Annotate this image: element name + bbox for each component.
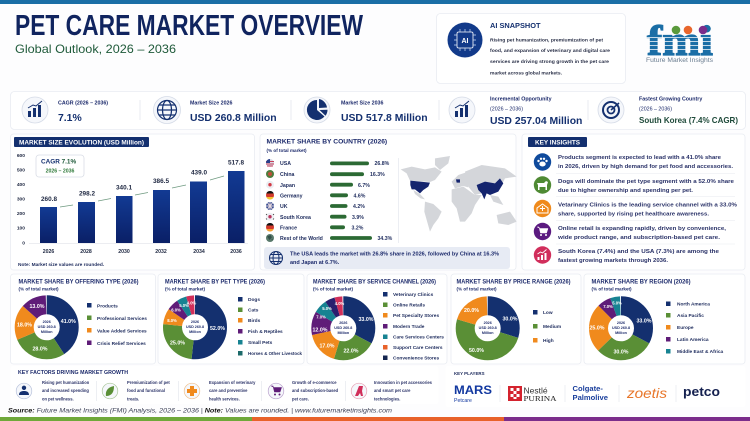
donut chart: offering type: USD 260.8 bbox=[38, 325, 56, 329]
donut chart: region: 33.0% bbox=[636, 318, 652, 324]
legend: service channel: Care Services Centers bbox=[393, 334, 444, 340]
logo: Petco: petco bbox=[683, 384, 720, 399]
country bars: China bbox=[280, 172, 295, 178]
donut chart: region: 30.0% bbox=[613, 349, 629, 355]
factor: veterinary care: care and preventive bbox=[209, 388, 248, 393]
bar chart: 439.0 bbox=[191, 170, 207, 176]
icons: country flags bbox=[266, 159, 274, 242]
donut chart: price range: USD 260.8 bbox=[479, 326, 497, 330]
factor: pet humanization: Rising pet humanization bbox=[42, 380, 90, 385]
panel: price range: (% of total market) bbox=[456, 286, 497, 292]
factor: premiumization: Premiumization of pet bbox=[127, 380, 170, 385]
factor: innovation: and smart pet care bbox=[374, 388, 411, 393]
panel: region: (% of total market) bbox=[592, 286, 632, 292]
panel: offering type bbox=[10, 274, 156, 364]
logo: Nestle Purina: Nestlé bbox=[524, 386, 548, 396]
logo: Zoetis: zoetis bbox=[626, 385, 667, 401]
donut chart: price range: Million bbox=[482, 331, 494, 335]
bottom colour band bbox=[0, 417, 750, 421]
legend: service channel: Convenience Stores bbox=[393, 356, 439, 362]
country bars: 3.9% bbox=[352, 215, 364, 221]
logo: Mars Petcare: MARS bbox=[454, 385, 492, 397]
legend: service channel: Modern Trade bbox=[393, 324, 425, 330]
insight: veterinary clinics: share, supported by rising pet healthcare awareness. bbox=[558, 212, 709, 218]
donut chart: price range: 50.0% bbox=[469, 348, 484, 354]
bar chart: 2036 bbox=[230, 249, 242, 255]
title: PET CARE MARKET OVERVIEW bbox=[15, 10, 363, 42]
heading: price range: MARKET SHARE BY PRICE RANGE (2026) bbox=[456, 278, 570, 286]
factor: innovation: Innovation in pet accessories bbox=[374, 380, 433, 385]
factor: pet humanization: on pet wellness. bbox=[42, 396, 74, 402]
donut chart: offering type bbox=[17, 304, 76, 352]
factor: premiumization bbox=[102, 380, 170, 402]
KPI: market size 2036 bbox=[304, 97, 428, 124]
donut chart: pet type: 52.0% bbox=[210, 326, 225, 332]
donut chart: offering type: Million bbox=[41, 330, 53, 334]
legend: region: Middle East & Africa bbox=[677, 349, 724, 355]
KPI: fastest growing country bbox=[598, 96, 738, 125]
donut chart: offering type: 13.0% bbox=[29, 304, 45, 310]
KPI: incremental opportunity: (2026 – 2036) bbox=[490, 106, 523, 112]
legend: price range: Low bbox=[543, 310, 553, 316]
factor: premiumization: food and functional bbox=[127, 388, 165, 393]
logo: Mars Petcare bbox=[454, 385, 492, 404]
donut chart: service channel: 17.0% bbox=[319, 343, 335, 349]
bar chart bbox=[17, 153, 248, 255]
donut chart: offering type: 28.0% bbox=[32, 346, 48, 352]
panel: market share by country: (% of total market) bbox=[266, 148, 307, 153]
panel: KPI strip bbox=[10, 92, 746, 130]
panel: region bbox=[584, 274, 745, 364]
factor: pet humanization bbox=[16, 380, 90, 402]
donut chart: region: Million bbox=[615, 331, 628, 335]
panel: key factors bbox=[10, 366, 438, 404]
legend: service channel: Support Care Centers bbox=[393, 345, 443, 351]
country bars bbox=[280, 161, 393, 242]
donut chart: pet type: Million bbox=[189, 330, 202, 334]
country bars: 4.6% bbox=[354, 194, 366, 200]
legend: price range: High bbox=[543, 338, 554, 344]
donut chart: region: 5.0% bbox=[612, 301, 622, 306]
donut chart: pet type: USD 260.8 bbox=[186, 325, 204, 329]
country bars: UK bbox=[280, 204, 288, 210]
CAGR callout: 2026 – 2036 bbox=[46, 168, 75, 174]
country bars: 16.3% bbox=[370, 172, 385, 178]
legend: pet type: Fish & Reptiles bbox=[248, 329, 283, 335]
legend: price range bbox=[533, 310, 561, 344]
icon: AI chip: AI bbox=[462, 38, 469, 45]
factor: innovation: technologies. bbox=[374, 396, 400, 402]
country bars: 34.3% bbox=[378, 236, 393, 242]
donut chart: pet type: 25.0% bbox=[170, 340, 185, 346]
legend: pet type: Small Pets bbox=[248, 340, 273, 346]
bar chart: 100 bbox=[17, 226, 25, 232]
heading: key insights bbox=[528, 137, 587, 147]
KPI: incremental opportunity: Incremental Opportunity bbox=[490, 96, 552, 102]
bar chart: 300 bbox=[17, 196, 25, 202]
panel: price range bbox=[451, 274, 581, 364]
donut chart: service channel: 33.0% bbox=[358, 317, 374, 323]
bar chart: 2032 bbox=[155, 249, 167, 255]
insight: online retail bbox=[534, 223, 726, 241]
callout: country summary bbox=[264, 247, 510, 269]
factor: innovation bbox=[351, 380, 433, 402]
heading: service channel: MARKET SHARE BY SERVICE CHANNEL (2026) bbox=[313, 278, 436, 286]
insight: online retail: wide product range, and subscription-based pet care. bbox=[557, 235, 720, 241]
callout: country summary: The USA leads the market with 26.8% share in 2026, followed by China at 16.3% bbox=[290, 252, 499, 258]
donut chart: service channel: 2026 bbox=[339, 321, 347, 325]
bar chart: 2026 bbox=[43, 249, 54, 255]
bar chart: 200 bbox=[17, 211, 25, 217]
icon: AI chip bbox=[448, 22, 482, 58]
donut chart: region: USD 260.8 bbox=[612, 326, 630, 330]
legend: offering type: Professional Services bbox=[97, 316, 147, 322]
KPI: CAGR bbox=[22, 97, 108, 124]
AI snapshot heading: AI SNAPSHOT bbox=[490, 21, 541, 30]
source line: Source: Future Market Insights (FMI) Analysis, 2026 – 2036 | Note: Values are rounded. | www.futuremarketinsights.com bbox=[8, 408, 393, 414]
donut chart: pet type: 5.0% bbox=[179, 303, 189, 308]
insight: veterinary clinics bbox=[534, 200, 738, 218]
logo: Nestle Purina bbox=[508, 386, 557, 403]
factor: veterinary care: health services. bbox=[209, 396, 240, 402]
country bars: 6.7% bbox=[358, 183, 370, 189]
donut chart: region: 2026 bbox=[617, 321, 625, 325]
factor: e-commerce: Growth of e-commerce bbox=[292, 380, 337, 385]
factor: veterinary care bbox=[184, 380, 256, 402]
CAGR callout: CAGR 7.1% bbox=[41, 158, 76, 166]
donut chart: service channel: 22.0% bbox=[343, 348, 359, 354]
legend: region: North America bbox=[677, 302, 710, 308]
donut chart: service channel: 5.0% bbox=[322, 306, 332, 311]
KPI: incremental opportunity: USD 257.04 Million bbox=[490, 116, 582, 127]
panel: AI snapshot bbox=[436, 14, 626, 84]
panel: market size evolution bbox=[10, 134, 254, 270]
logo: Future Market Insights: fmi bbox=[647, 19, 713, 65]
legend: region: Latin America bbox=[677, 337, 709, 343]
KPI: incremental opportunity bbox=[449, 96, 582, 127]
heading: region: MARKET SHARE BY REGION (2026) bbox=[592, 278, 690, 286]
panel: market share by country bbox=[260, 134, 517, 270]
factor: e-commerce: pet care. bbox=[292, 396, 309, 402]
legend: service channel: Veterinary Clinics bbox=[393, 292, 434, 298]
panel: key players bbox=[446, 366, 746, 407]
donut chart: offering type: 2026 bbox=[43, 320, 51, 324]
KPI: market size 2036: USD 517.8 Million bbox=[341, 113, 428, 124]
country bars: USA bbox=[280, 161, 291, 167]
legend: service channel: Pet Specialty Stores bbox=[393, 313, 439, 319]
country bars: Japan bbox=[280, 183, 295, 189]
bar chart: 517.8 bbox=[228, 160, 244, 166]
legend: offering type: Value Added Services bbox=[97, 328, 147, 334]
heading: pet type: MARKET SHARE BY PET TYPE (2026) bbox=[165, 278, 265, 286]
legend: pet type: Birds bbox=[248, 318, 261, 324]
KPI: market size 2026: Market Size 2026 bbox=[190, 100, 232, 106]
bar chart: 400 bbox=[17, 182, 25, 188]
insight: dogs bbox=[534, 176, 735, 194]
country bars: France bbox=[280, 226, 297, 232]
donut chart: service channel: USD 260.8 bbox=[334, 326, 352, 330]
insight: online retail: Online retail is expanding rapidly, driven by convenience, bbox=[558, 226, 726, 232]
legend: pet type: Dogs bbox=[248, 297, 260, 303]
panel: pet type bbox=[158, 274, 304, 364]
donut chart: offering type: 18.0% bbox=[17, 322, 32, 328]
insight: products: Products segment is expected to lead with a 41.0% share bbox=[558, 155, 722, 161]
bar chart: 2028 bbox=[80, 249, 92, 255]
insight: products bbox=[534, 153, 733, 171]
donut chart: pet type: 6.0% bbox=[171, 308, 181, 313]
KPI: market size 2026: USD 260.8 Million bbox=[190, 113, 277, 124]
logo: Future Market Insights: Future Market Insights bbox=[646, 57, 713, 64]
factor: e-commerce: and subscription-based bbox=[292, 388, 339, 393]
legend: service channel bbox=[383, 292, 444, 362]
donut chart: service channel bbox=[312, 301, 374, 354]
bar chart: 260.8 bbox=[41, 196, 57, 203]
donut chart: region: 25.0% bbox=[589, 325, 605, 331]
insight: dogs: Dogs will dominate the pet type segment with a 52.0% share bbox=[558, 179, 735, 185]
heading: market share by country: MARKET SHARE BY COUNTRY (2026) bbox=[266, 138, 387, 146]
donut chart: price range: 2026 bbox=[484, 321, 492, 325]
insight: fastest growing markets: South Korea (7.4%) and the USA (7.3%) are among the bbox=[558, 249, 720, 255]
country bars: South Korea bbox=[280, 215, 311, 221]
bar chart: 2030 bbox=[118, 249, 130, 255]
panel: pet type: (% of total market) bbox=[165, 286, 206, 292]
bar chart: 298.2 bbox=[79, 190, 95, 198]
legend: pet type: Horses & Other Livestock bbox=[248, 351, 302, 357]
legend: pet type: Cats bbox=[248, 308, 259, 314]
insight: fastest growing markets: fastest growing markets through 2036. bbox=[558, 258, 668, 264]
KPI: CAGR: CAGR (2026 – 2036) bbox=[58, 100, 108, 106]
AI snapshot text: market across global markets. bbox=[490, 70, 563, 76]
insight: veterinary clinics: Vetarinary Clinics is the leading service channel with a 33.0% bbox=[558, 202, 738, 208]
donut chart: pet type: 8.0% bbox=[167, 318, 177, 323]
AI snapshot text: Rising pet humanization, premiumization of pet bbox=[490, 38, 603, 44]
heading: market size evolution bbox=[14, 137, 149, 147]
donut chart: service channel: Million bbox=[337, 331, 350, 335]
factor: premiumization: treats. bbox=[127, 396, 139, 402]
chart note: Note: Market size values are rounded. bbox=[18, 262, 104, 268]
legend: offering type: Crisis Relief Services bbox=[97, 341, 146, 347]
country bars: Germany bbox=[280, 194, 303, 200]
donut chart: pet type: 4.0% bbox=[187, 301, 197, 306]
KPI: CAGR: 7.1% bbox=[58, 113, 82, 124]
donut chart: offering type: 41.0% bbox=[61, 319, 76, 325]
factor: e-commerce bbox=[268, 380, 339, 402]
legend: offering type bbox=[87, 303, 147, 347]
legend: region: Europe bbox=[677, 325, 694, 331]
heading: key players: KEY PLAYERS bbox=[454, 371, 485, 376]
AI snapshot text: services are driving strong growth in the pet care bbox=[490, 59, 609, 65]
legend: pet type bbox=[238, 297, 302, 357]
legend: region bbox=[666, 302, 724, 355]
logo: Nestle Purina: PURINA bbox=[524, 394, 557, 403]
heading: market size evolution: MARKET SIZE EVOLUTION (USD Million) bbox=[19, 140, 144, 146]
bar chart: 500 bbox=[17, 168, 25, 174]
donut chart: region bbox=[589, 301, 652, 355]
factor: veterinary care: Expansion of veterinary bbox=[209, 380, 256, 385]
country bars: 26.8% bbox=[374, 161, 390, 167]
bar chart: 340.1 bbox=[116, 184, 132, 192]
AI snapshot text bbox=[490, 38, 610, 76]
legend: service channel: Online Retails bbox=[393, 302, 425, 308]
KPI: fastest growing country: (2026 – 2036) bbox=[639, 106, 672, 112]
insight: products: in 2026, driven by high demand for pet food and accessories. bbox=[558, 164, 733, 170]
country bars: 3.2% bbox=[352, 226, 364, 232]
heading: offering type: MARKET SHARE BY OFFERING TYPE (2026) bbox=[18, 278, 138, 286]
KPI: fastest growing country: Fastest Growing Country bbox=[639, 96, 702, 102]
top band bbox=[0, 0, 750, 4]
legend: price range: Medium bbox=[543, 324, 561, 330]
donut chart: service channel: 12.0% bbox=[312, 327, 328, 333]
donut chart: pet type bbox=[167, 301, 225, 350]
panel: offering type: (% of total market) bbox=[18, 286, 59, 292]
country bars: 4.2% bbox=[353, 204, 365, 210]
KPI: market size 2036: Market Size 2036 bbox=[341, 100, 383, 106]
insight: dogs: due to higher ownership and spending per pet. bbox=[558, 188, 693, 194]
logo: Colgate-Palmolive: Colgate- bbox=[572, 384, 603, 393]
donut chart: service channel: 4.0% bbox=[335, 301, 345, 306]
panel: key insights bbox=[522, 134, 745, 270]
AI snapshot text: food, and expansion of veterinary and digital care bbox=[490, 48, 610, 54]
country bars: Rest of the World bbox=[280, 236, 323, 242]
bar chart: 0 bbox=[22, 240, 25, 246]
logo: Mars Petcare: Petcare bbox=[454, 398, 472, 404]
insight: fastest growing markets bbox=[534, 246, 720, 264]
donut chart: service channel: 7.0% bbox=[316, 315, 326, 320]
CAGR callout bbox=[36, 155, 84, 177]
bar chart: 2034 bbox=[193, 249, 205, 255]
KPI: fastest growing country: South Korea (7.4% CAGR) bbox=[639, 115, 738, 125]
donut chart: price range: 30.0% bbox=[502, 316, 518, 322]
heading: key insights: KEY INSIGHTS bbox=[535, 140, 581, 146]
panel: service channel: (% of total market) bbox=[313, 286, 354, 292]
legend: region: Asia Pacific bbox=[677, 313, 704, 319]
donut chart: price range bbox=[464, 306, 518, 354]
donut chart: region: 7.0% bbox=[603, 304, 613, 309]
heading: key factors: KEY FACTORS DRIVING MARKET GROWTH bbox=[18, 370, 128, 376]
donut chart: price range: 20.0% bbox=[464, 308, 479, 314]
factor: pet humanization: and increased spending bbox=[42, 388, 89, 393]
logo: Colgate-Palmolive bbox=[572, 384, 608, 402]
world map bbox=[401, 156, 517, 232]
subtitle: Global Outlook, 2026 – 2036 bbox=[15, 43, 176, 56]
legend: offering type: Products bbox=[97, 304, 118, 310]
bar chart: 386.5 bbox=[153, 178, 169, 185]
panel: service channel bbox=[307, 274, 447, 364]
logo: Colgate-Palmolive: Palmolive bbox=[572, 393, 608, 402]
KPI: market size 2026 bbox=[154, 96, 277, 124]
donut chart: pet type: 2026 bbox=[191, 320, 199, 324]
callout: country summary: and Japan at 6.7%. bbox=[290, 260, 340, 266]
bar chart: 600 bbox=[17, 153, 25, 159]
